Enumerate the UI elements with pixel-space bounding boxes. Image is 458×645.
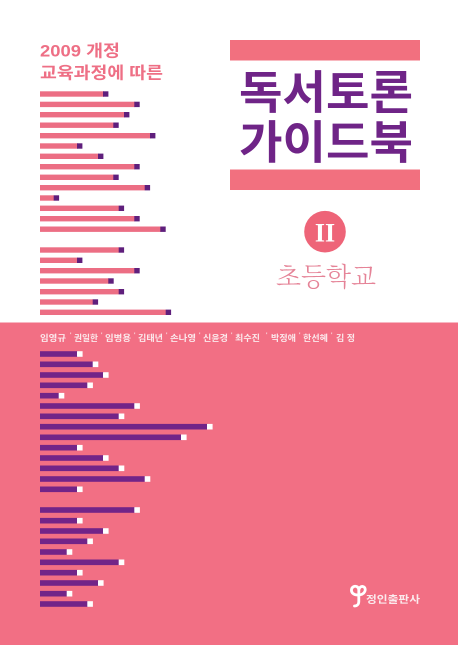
subtitle: curriculum [40, 42, 163, 82]
author names: 임병용 [105, 333, 131, 343]
top pink bar chart, second group [40, 247, 171, 315]
title text: 가이드북 [239, 117, 413, 168]
title text [239, 68, 413, 168]
author names: ' [101, 333, 103, 339]
author names: ' [266, 333, 268, 339]
icon: ribbon mark [351, 586, 365, 606]
author names: ' [331, 333, 333, 339]
subtitle: curriculum: 2009 개정 [40, 42, 120, 60]
top pink bar chart, first group [40, 91, 166, 232]
bottom purple bar chart, second group [40, 507, 140, 607]
author names: 임영규 [40, 333, 66, 343]
title text: 독서토론 [239, 68, 413, 118]
author names [40, 333, 355, 343]
publisher name: 정인출판사 [366, 593, 420, 606]
lower pink panel [0, 322, 458, 645]
lower title band [230, 170, 420, 190]
author names: ' [70, 333, 72, 339]
author names: 손나영 [170, 333, 196, 343]
subtitle: curriculum: 교육과정에 따른 [40, 64, 163, 82]
subtitle: elementary school: 초등학교 [276, 257, 376, 294]
author names: ' [134, 333, 136, 339]
author names: 박정애 [271, 333, 296, 343]
author names: ' [199, 333, 201, 339]
author names: 김 정 [336, 333, 355, 343]
author names: 권일한 [74, 333, 98, 343]
author names: 한선혜 [303, 333, 328, 343]
upper title band [230, 40, 420, 60]
bottom purple bar chart, first group [40, 351, 213, 492]
volume badge II [304, 211, 346, 252]
author names: ' [166, 333, 168, 339]
author names: ' [299, 333, 301, 339]
publisher logo [351, 586, 420, 606]
author names: 최수진 [235, 333, 260, 343]
volume badge II: II [315, 218, 335, 248]
author names: ' [231, 333, 233, 339]
author names: 김태년 [138, 333, 163, 343]
author names: 신윤경 [203, 333, 228, 343]
title block [230, 40, 420, 190]
